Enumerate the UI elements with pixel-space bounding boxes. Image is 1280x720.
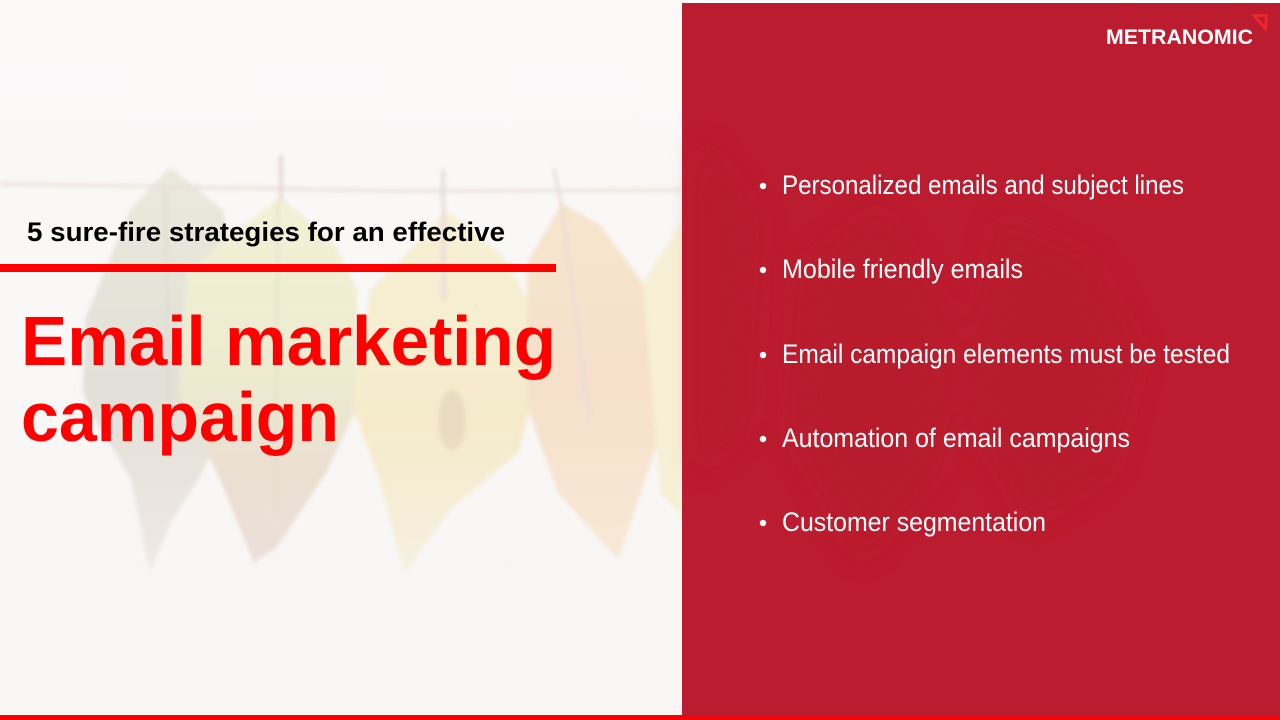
bullet 3: Email campaign elements must be tested bbox=[782, 339, 1230, 369]
title: campaign bbox=[21, 378, 339, 456]
title: Email marketing bbox=[21, 302, 556, 380]
bullet 2: Mobile friendly emails bbox=[782, 254, 1023, 284]
leaf spot bbox=[438, 390, 466, 450]
bullet 1: Personalized emails and subject lines bbox=[782, 170, 1184, 200]
panel: strategies bbox=[682, 3, 1280, 720]
leaf: green bbox=[83, 167, 240, 572]
leaf: right yellow bbox=[643, 220, 682, 517]
icon: logo triangle bbox=[1254, 16, 1266, 29]
leaf: orange bbox=[527, 203, 670, 560]
logo: Metranomic bbox=[1106, 16, 1266, 49]
logo: Metranomic: METRANOMIC bbox=[1106, 25, 1253, 49]
leaf: yellow bbox=[353, 210, 549, 573]
leaf: yellow-green bbox=[178, 197, 357, 563]
bullet 5: Customer segmentation bbox=[782, 507, 1046, 537]
bullet 4: Automation of email campaigns bbox=[782, 423, 1130, 453]
title bbox=[21, 302, 556, 456]
strategy list bbox=[760, 170, 1230, 537]
background panel: leaves photo bbox=[0, 0, 682, 720]
string and stems bbox=[0, 155, 682, 520]
bottom red bar bbox=[0, 715, 1280, 720]
subtitle: 5 sure-fire strategies for an effective bbox=[27, 217, 505, 247]
red rule bbox=[0, 264, 556, 272]
